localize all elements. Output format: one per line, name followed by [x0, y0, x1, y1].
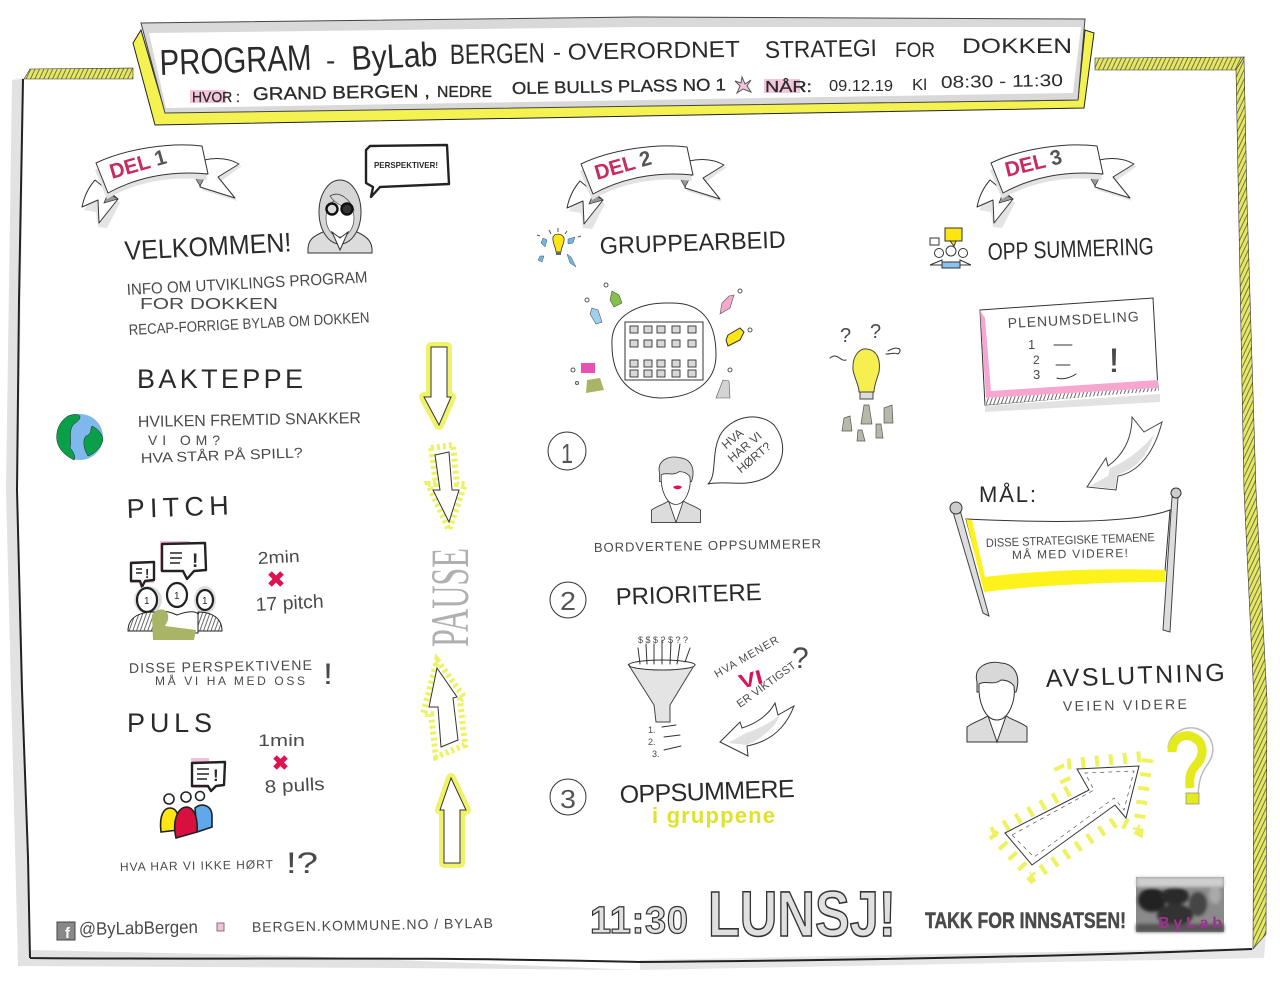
text: hva mener vi er viktigst — [712, 634, 809, 710]
text: disse perspektivene — [129, 657, 333, 691]
text: hva har vi ikke hørt: HVA HAR VI IKKE HØRT — [120, 857, 274, 874]
arrow: to mål — [1087, 417, 1162, 490]
icon: puls group: ! — [213, 766, 219, 785]
title banner — [133, 17, 1094, 125]
panel: plenumsdeling — [980, 298, 1160, 412]
text: lunsj: LUNSJ! — [708, 878, 896, 950]
arrow: forward big — [992, 756, 1148, 877]
panel: plenumsdeling: ! — [1108, 342, 1120, 380]
title line: STRATEGI — [765, 35, 877, 64]
icon: funnel: 3. — [652, 749, 660, 759]
text: disse perspektivene: ! — [323, 658, 333, 691]
icon: idea bulb small — [537, 228, 581, 267]
text: hva har vi ikke hørt — [120, 847, 318, 880]
panel: plenumsdeling: PLENUMSDELING — [1007, 308, 1139, 331]
heading: bakteppe: BAKTEPPE — [137, 364, 303, 394]
text: pause: PAUSE — [420, 548, 480, 647]
ribbon: del 2 — [567, 146, 727, 229]
location and time line: HVOR : — [192, 89, 240, 106]
footer: social and url: f — [65, 925, 71, 942]
panel: plenumsdeling: 3 — [1033, 367, 1040, 382]
text: hva mener vi er viktigst: VI — [737, 666, 765, 694]
pitch stats: 2min — [257, 547, 300, 568]
pitch stats — [255, 547, 324, 616]
location and time line — [190, 71, 1063, 106]
step 2 badge — [550, 582, 586, 618]
panel: banner with poles: MÅ MED VIDERE! — [1012, 545, 1128, 562]
title line: - — [326, 45, 335, 76]
location and time line: 08:30 - 11:30 — [941, 71, 1063, 92]
puls stats: 8 pulls — [264, 774, 325, 797]
photo: workshop — [1136, 877, 1224, 932]
speech bubble: hva har vi hørt: HØRT? — [734, 439, 774, 476]
ribbon: del 2: DEL 2 — [592, 147, 654, 185]
title line: - OVERORDNET — [553, 36, 740, 65]
footer: social and url: @ByLabBergen — [79, 917, 198, 939]
person: bordvert — [651, 457, 701, 522]
speech bubble: hva har vi hørt: HAR VI — [725, 429, 765, 465]
title line — [159, 35, 1072, 83]
title line: ByLab — [350, 36, 438, 78]
text: disse perspektivene: MÅ VI HA MED OSS — [155, 673, 305, 688]
ribbon: del 3: DEL 3 — [1003, 146, 1064, 182]
icon: pitch group: 1 — [144, 596, 150, 607]
arrow: down 1 — [424, 347, 451, 425]
icon: puls group — [161, 758, 225, 838]
text: bakteppe questions: HVILKEN FREMTID SNAKKER — [138, 410, 361, 431]
icon: question mark yellow — [1168, 728, 1213, 804]
icon: bulb with questions — [830, 321, 900, 441]
location and time line: NÅR: — [765, 77, 812, 96]
icon: funnel: 2. — [648, 737, 656, 747]
panel: plenumsdeling: 1 — [1028, 337, 1035, 352]
footer: social and url: BERGEN.KOMMUNE.NO / BYLAB — [252, 915, 493, 935]
title line: DOKKEN — [962, 35, 1072, 58]
icon: summary group — [930, 228, 971, 268]
coloured notes — [571, 283, 752, 398]
text: velkommen details: RECAP-FORRIGE BYLAB OM DOKKEN — [128, 309, 370, 339]
speech bubble: hva har vi hørt — [708, 417, 783, 484]
text: velkommen details: INFO OM UTVIKLINGS PROGRAM — [126, 269, 368, 299]
arrow: back to funnel — [720, 703, 794, 756]
speech bubble: hva har vi hørt: HVA — [719, 426, 746, 452]
step 1 badge — [548, 432, 586, 470]
icon: funnel — [628, 635, 695, 759]
icon: pitch group: ! — [192, 551, 198, 572]
icon: bulb with questions: ? — [840, 325, 851, 347]
heading: prioritere: PRIORITERE — [615, 579, 762, 611]
heading: velkommen: VELKOMMEN! — [124, 227, 292, 266]
ribbon: del 1 — [82, 145, 242, 228]
text: bakteppe questions: HVA STÅR PÅ SPILL? — [141, 444, 303, 466]
text: bakteppe questions — [138, 410, 361, 466]
ribbon: del 3 — [977, 145, 1137, 228]
heading: oppsummere: OPPSUMMERE — [619, 775, 795, 809]
step 3 badge — [550, 779, 586, 815]
text: takk for innsatsen: TAKK FOR INNSATSEN! — [925, 908, 1126, 933]
icon: pitch group: ! — [145, 566, 149, 581]
icon: bulb with questions: ? — [870, 321, 881, 343]
step 3 badge: 3 — [560, 784, 576, 814]
icon: pitch group — [128, 541, 222, 640]
pitch stats: 17 pitch — [255, 591, 324, 616]
sticky grid — [630, 326, 696, 377]
panel: plenumsdeling: 2 — [1033, 353, 1040, 367]
heading: avslutning: AVSLUTNING — [1045, 659, 1225, 693]
heading: mål: MÅL: — [979, 482, 1036, 507]
heading: gruppearbeid: GRUPPEARBEID — [599, 227, 786, 260]
text: i gruppene: i gruppene — [652, 803, 775, 828]
title line: FOR — [895, 39, 935, 62]
icon: pitch group: 1 — [174, 591, 180, 602]
location and time line: OLE BULLS PLASS NO 1 — [512, 75, 726, 98]
location and time line: 09.12.19 — [829, 78, 893, 95]
text: hva har vi ikke hørt: !? — [286, 847, 318, 880]
icon: funnel: 1. — [648, 725, 656, 735]
arrow: up 3 — [423, 660, 465, 757]
arrow: up 4 — [440, 778, 466, 863]
text: veien videre: VEIEN VIDERE — [1063, 696, 1187, 714]
icon: funnel: $ $ $ ? $ ? ? — [638, 635, 688, 645]
panel: banner with poles: DISSE STRATEGISKE TEMAENE — [986, 530, 1155, 550]
location and time line: NEDRE — [437, 84, 492, 101]
person: avslutning — [967, 662, 1027, 742]
title line: PROGRAM — [159, 37, 312, 83]
text: hva mener vi er viktigst: ? — [792, 642, 809, 675]
text: disse perspektivene: DISSE PERSPEKTIVENE — [129, 657, 312, 676]
location and time line: GRAND BERGEN , — [253, 81, 430, 104]
icon: pitch group: 1 — [202, 596, 208, 607]
title line: BERGEN — [450, 37, 545, 70]
footer: social and url — [57, 915, 493, 942]
location and time line: Kl — [912, 77, 927, 94]
woman presenter icon — [308, 180, 372, 253]
puls stats — [258, 731, 325, 797]
heading: puls: PULS — [127, 708, 212, 738]
text: hva mener vi er viktigst: ER VIKTIGST — [735, 659, 799, 710]
puls stats: 1min — [258, 731, 305, 750]
icon: globe — [57, 414, 103, 460]
text: velkommen details — [126, 269, 370, 339]
heading: oppsummering: OPP SUMMERING — [987, 233, 1154, 266]
arrow: down 2 — [428, 445, 465, 530]
text: bordvertene oppsummerer: BORDVERTENE OPPSUMMERER — [594, 536, 821, 555]
small people — [842, 405, 893, 441]
panel: banner with poles — [950, 488, 1181, 632]
photo: workshop: ByLab — [1158, 915, 1222, 932]
text: velkommen details: FOR DOKKEN — [140, 296, 278, 313]
ribbon: del 1: DEL 1 — [107, 146, 169, 184]
board with sticky notes — [571, 283, 752, 398]
text: 11:30: 11:30 — [590, 900, 688, 942]
speech bubble: perspektiver: PERSPEKTIVER! — [374, 160, 438, 170]
step 2 badge: 2 — [560, 586, 576, 616]
step 1 badge: 1 — [561, 438, 573, 469]
text: bakteppe questions: VI OM? — [148, 432, 220, 448]
heading: pitch: PITCH — [126, 490, 229, 524]
speech bubble: perspektiver — [366, 145, 449, 197]
text: hva mener vi er viktigst: HVA MENER — [712, 634, 781, 681]
